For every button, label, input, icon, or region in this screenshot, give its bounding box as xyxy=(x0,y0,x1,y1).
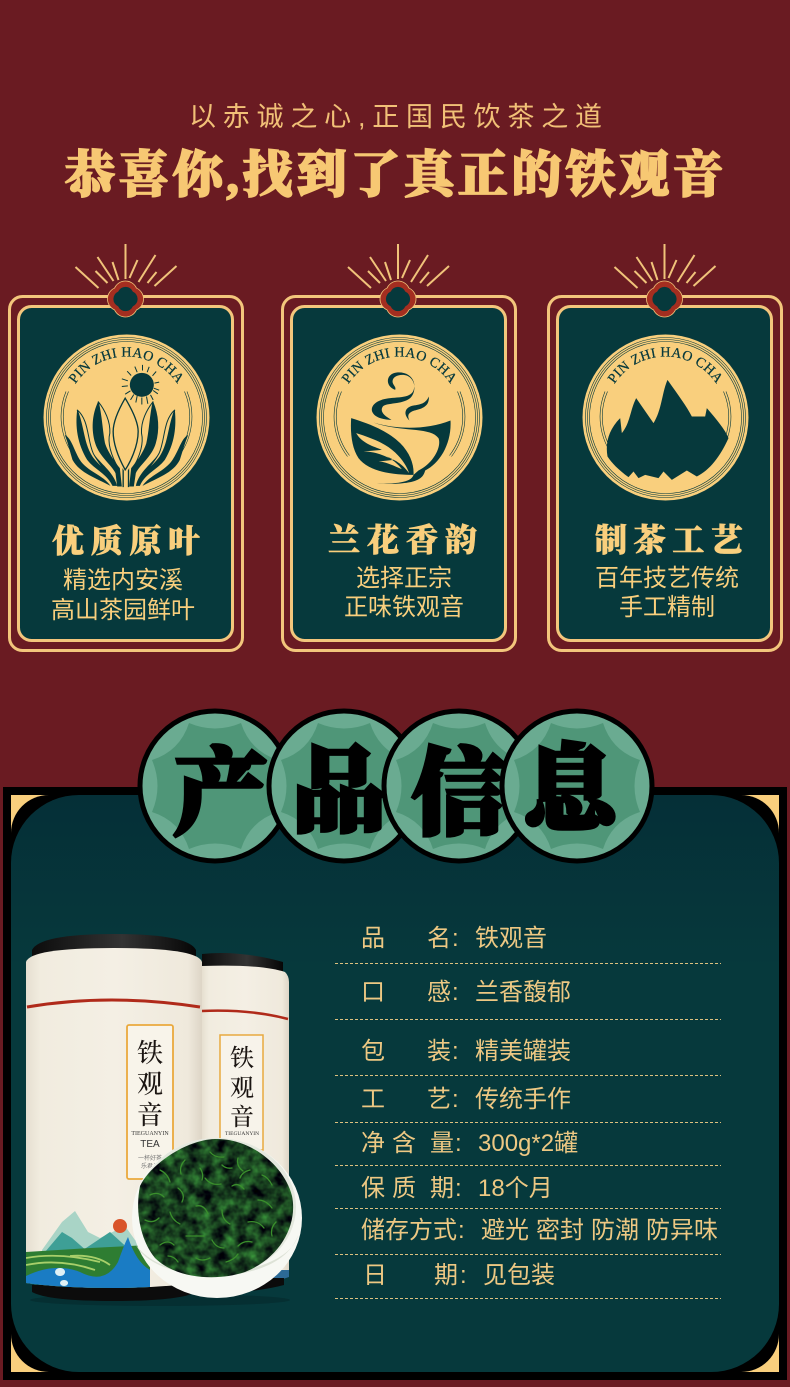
text block: 手工精制 xyxy=(619,594,715,621)
row: shelf life: 期 xyxy=(430,1175,454,1202)
row: taste: 感 xyxy=(427,979,451,1006)
text block: 高山茶园鲜叶 xyxy=(51,597,195,624)
circle: 信: 信 xyxy=(412,743,506,847)
can label: TEA xyxy=(140,1139,160,1150)
tea leaves xyxy=(138,1139,294,1278)
row: date: 日 xyxy=(363,1262,387,1289)
text block xyxy=(595,565,739,621)
row: name: 品 xyxy=(361,925,385,952)
row: date: 期 xyxy=(434,1262,458,1289)
row: storage: 密封 xyxy=(536,1217,584,1244)
icon: rays and knot xyxy=(76,244,176,317)
row: storage: 储存方式 xyxy=(361,1217,457,1244)
text block: 百年技艺传统 xyxy=(595,565,739,592)
panel: tea craft xyxy=(547,244,783,652)
back can: 铁 xyxy=(230,1045,254,1072)
can label: TIEGUANYIN xyxy=(131,1131,169,1137)
icon: lotus medallion: PIN ZHI HAO CHA xyxy=(68,347,182,384)
heading: quality leaves: 优质原叶 xyxy=(52,523,200,559)
circle: 产 xyxy=(140,711,290,861)
spec table xyxy=(335,925,721,1298)
row: net weight: 量 xyxy=(430,1130,454,1157)
card frame xyxy=(548,296,782,650)
row: taste: 口 xyxy=(361,979,385,1006)
panel frame xyxy=(3,787,787,1380)
row: date: : xyxy=(460,1262,467,1289)
row: packaging: 包 xyxy=(361,1038,385,1065)
row: packaging: 精美罐装 xyxy=(475,1038,571,1065)
row: name: 铁观音 xyxy=(475,925,547,952)
panel: product info xyxy=(3,787,787,1380)
row: net weight: 净 xyxy=(361,1130,385,1157)
back can: 观 xyxy=(230,1075,254,1102)
row: net weight: : xyxy=(455,1130,462,1157)
subtitle: 以赤诚之心,正国民饮茶之道 xyxy=(189,102,602,132)
icon: rays and knot xyxy=(614,244,716,317)
row: craft: : xyxy=(452,1086,459,1113)
row: taste: : xyxy=(452,979,459,1006)
row: shelf life: 质 xyxy=(392,1175,416,1202)
row: name: 名 xyxy=(427,925,451,952)
row: net weight: 300g*2罐 xyxy=(478,1130,578,1157)
icon: tea cup medallion xyxy=(316,334,482,500)
can label: 铁 xyxy=(137,1039,163,1068)
text block xyxy=(51,567,195,624)
text block: 选择正宗 xyxy=(356,565,452,592)
front can xyxy=(26,934,202,1301)
can label: 一杯好茶 xyxy=(138,1154,162,1162)
circle: 产: 产 xyxy=(174,743,268,847)
row: name: : xyxy=(452,925,459,952)
title: 恭喜你,找到了真正的铁观音 xyxy=(65,147,723,203)
back can: TIEGUANYIN xyxy=(225,1131,259,1137)
icon: lotus medallion xyxy=(44,334,210,500)
heading: product information circles xyxy=(140,711,652,861)
panel: orchid fragrance xyxy=(281,244,517,652)
can label xyxy=(127,1025,173,1179)
row: net weight: 含 xyxy=(392,1130,416,1157)
row: craft: 传统手作 xyxy=(475,1086,571,1113)
can shadow xyxy=(30,1294,290,1306)
product image: tea cans and bowl xyxy=(26,934,302,1306)
row: shelf life: 18个月 xyxy=(478,1175,553,1202)
circle: 息 xyxy=(502,711,652,861)
row: shelf life: : xyxy=(455,1175,462,1202)
row: packaging: : xyxy=(452,1038,459,1065)
heading: orchid fragrance: 兰花香韵 xyxy=(328,522,477,558)
can label: 观 xyxy=(137,1070,163,1099)
row: craft: 工 xyxy=(361,1086,385,1113)
text block: 精选内安溪 xyxy=(63,567,183,594)
row: taste: 兰香馥郁 xyxy=(475,979,571,1006)
icon: mountain medallion: PIN ZHI HAO CHA xyxy=(607,347,722,384)
row: date: 见包装 xyxy=(483,1262,555,1289)
circle: 品 xyxy=(269,711,419,861)
icon: rays and knot xyxy=(348,244,449,317)
can label: 音 xyxy=(137,1101,163,1130)
text block xyxy=(344,565,464,621)
bowl xyxy=(132,1138,302,1298)
text block: 正味铁观音 xyxy=(344,594,464,621)
icon: mountain medallion xyxy=(582,334,748,500)
back can: 音 xyxy=(230,1104,254,1131)
circle: 品: 品 xyxy=(292,741,386,845)
row: packaging: 装 xyxy=(427,1038,451,1065)
card frame xyxy=(282,296,516,650)
row: shelf life: 保 xyxy=(361,1175,385,1202)
circle: 息: 息 xyxy=(523,739,625,843)
back can xyxy=(202,953,289,1292)
can landscape xyxy=(26,1211,150,1290)
row: storage: 防潮 xyxy=(591,1217,639,1244)
row: storage: : xyxy=(458,1217,465,1244)
row: storage: 避光 xyxy=(481,1217,529,1244)
heading: tea craft: 制茶工艺 xyxy=(595,522,743,558)
card frame xyxy=(10,296,242,650)
row: storage: 防异味 xyxy=(646,1217,718,1244)
icon: tea cup medallion: PIN ZHI HAO CHA xyxy=(341,347,456,384)
circle: 信 xyxy=(384,711,534,861)
row: craft: 艺 xyxy=(427,1086,451,1113)
panel: quality leaves xyxy=(8,244,244,652)
can label: 乐君品 xyxy=(141,1163,159,1170)
